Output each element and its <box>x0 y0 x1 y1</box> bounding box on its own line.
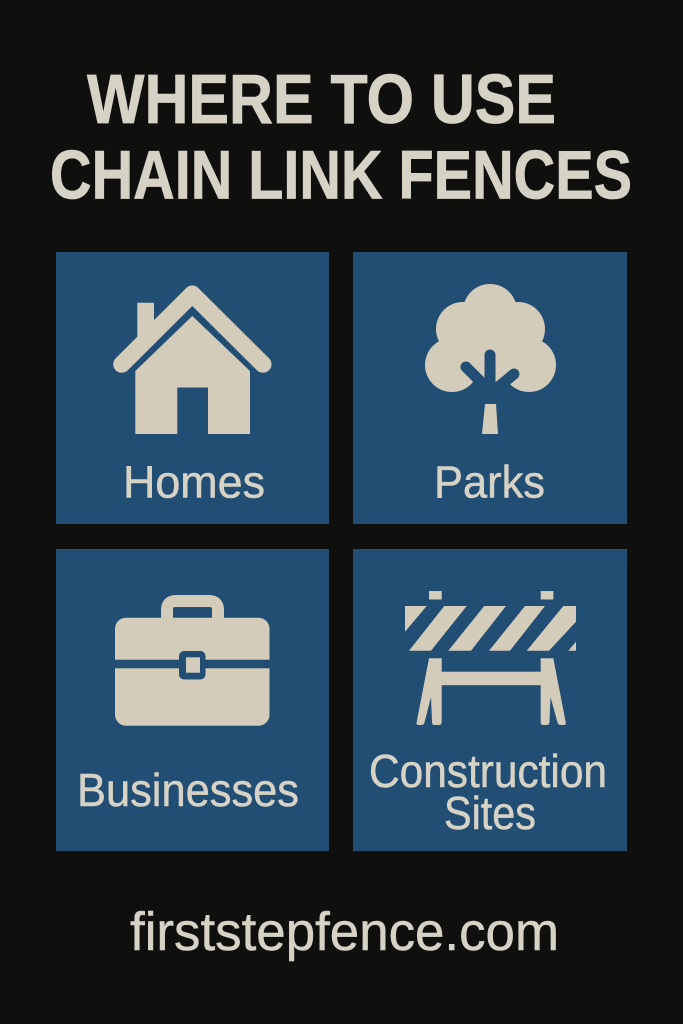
label: homes: Homes <box>123 457 265 508</box>
icon: briefcase <box>115 601 270 726</box>
panel: parks <box>353 252 627 524</box>
label: parks: Parks <box>434 457 545 508</box>
icon: barricade <box>405 591 576 725</box>
title: WHERE TO USE <box>87 60 556 138</box>
panel: homes <box>56 252 329 524</box>
website url: firststepfence.com <box>130 902 559 962</box>
label: construction sites: Sites <box>444 787 536 839</box>
icon: house <box>122 294 263 434</box>
panel: businesses <box>56 549 329 851</box>
label: businesses: Businesses <box>77 764 299 816</box>
title <box>50 60 632 214</box>
icon: tree <box>425 284 556 434</box>
label: construction sites: Construction <box>369 745 607 797</box>
label: construction sites <box>369 745 607 839</box>
panel: construction sites <box>353 549 627 851</box>
